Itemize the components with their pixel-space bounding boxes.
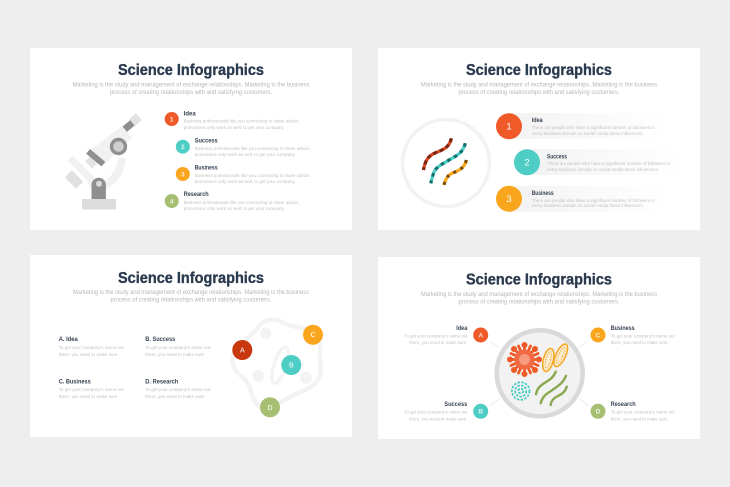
step 1 Idea: There are people who have a significant number of followers in <box>532 125 655 130</box>
title: Science Infographics <box>118 62 264 79</box>
list item: 4 Research: 4 <box>170 198 174 205</box>
text block: B. Success: To get your company's name out <box>145 345 211 350</box>
list item: 2 Success: 2 <box>181 144 185 151</box>
list item: 3 Business: promotions only work as well, to get your company. <box>195 179 296 184</box>
callout B Success: Success <box>444 402 468 408</box>
list item: 3 Business: Business professionals like you connecting to share advice, <box>195 173 311 178</box>
callout B Success <box>404 402 488 421</box>
subtitle <box>421 291 658 306</box>
step 1 Idea: every business domain on social media these influencers. <box>532 131 644 136</box>
step 3 Business: There are people who have a significant number of followers in <box>532 198 655 203</box>
panel: cell diagram <box>30 255 352 437</box>
connector lines <box>490 341 588 406</box>
subtitle: Marketing is the study and management of exchange relationships. Marketing is the business <box>72 82 310 88</box>
callout A Idea: To get your company's name out <box>404 333 468 338</box>
step 2 Success <box>514 149 680 175</box>
text block: B. Success: there, you need to make sure. <box>145 352 205 357</box>
callout D Research: To get your company's name out <box>611 409 675 414</box>
list item: 1 Idea: promotions only work as well, to get your company. <box>184 125 285 130</box>
text block: C. Business: C. Business <box>59 379 91 385</box>
text block: D. Research: To get your company's name out <box>145 387 211 392</box>
amber bacilli <box>541 342 570 373</box>
subtitle: process of creating relationships with and satisfying customers. <box>110 296 272 304</box>
list item: 4 Research: Business professionals like you connecting to share advice, <box>184 200 300 205</box>
list item: 2 Success: promotions only work as well, to get your company. <box>195 152 296 157</box>
callout D Research: Research <box>611 402 636 408</box>
panel: bacteria strands <box>378 48 700 230</box>
title: Science Infographics <box>466 62 612 79</box>
subtitle: process of creating relationships with and satisfying customers. <box>110 89 272 96</box>
subtitle: Marketing is the study and management of exchange relationships. Marketing is the business <box>73 289 310 296</box>
list item: 1 Idea <box>165 111 300 130</box>
list item: 2 Success: Success <box>195 138 218 144</box>
text block: C. Business: there, you need to make sure. <box>59 394 119 399</box>
step 2 Success: There are people who have a significant number of followers in <box>547 161 670 166</box>
marker B <box>281 355 301 375</box>
step 2 Success: Success <box>547 154 568 160</box>
marker B: B <box>289 362 294 370</box>
subtitle: Marketing is the study and management of exchange relationships. Marketing is the business <box>421 291 658 298</box>
subtitle <box>421 82 658 96</box>
callout B Success: To get your company's name out <box>404 409 468 414</box>
callout C Business: Business <box>611 326 635 332</box>
green worms <box>536 372 567 405</box>
marker C <box>303 325 323 345</box>
icon: microscope <box>65 113 142 210</box>
text block: A. Idea: To get your company's name out <box>59 345 124 350</box>
list item: 3 Business: Business <box>195 166 218 172</box>
subtitle: Marketing is the study and management of exchange relationships. Marketing is the business <box>421 82 658 88</box>
text block: D. Research: D. Research <box>145 379 179 385</box>
subtitle <box>73 289 310 304</box>
step 1 Idea <box>496 113 665 139</box>
panel: microscope list <box>30 48 352 230</box>
list item: 4 Research <box>165 192 300 211</box>
marker D: D <box>267 405 273 412</box>
icon: cell outline <box>233 320 321 409</box>
list item: 2 Success: Business professionals like you connecting to share advice, <box>195 146 311 151</box>
callout C Business: there, you need to make sure. <box>611 340 669 345</box>
callout C Business: To get your company's name out <box>611 333 675 338</box>
virus <box>508 343 541 376</box>
title: Science Infographics <box>118 270 264 287</box>
step 3 Business: 3 <box>506 194 512 205</box>
icon: petri circle with strands <box>402 120 490 206</box>
subtitle: process of creating relationships with and satisfying customers. <box>458 298 620 306</box>
step 3 Business: Business <box>532 191 554 197</box>
icon: petri dish <box>497 330 583 416</box>
text block: D. Research: there, you need to make sure. <box>145 394 205 399</box>
title: Science Infographics <box>466 272 612 288</box>
text block: C. Business <box>59 379 124 399</box>
list item: 4 Research: Research <box>184 192 209 198</box>
marker D <box>260 397 280 417</box>
text block: A. Idea <box>59 337 124 357</box>
callout D Research <box>590 402 675 421</box>
step 2 Success: every business domain on social media these influencers. <box>547 167 659 172</box>
list item: 4 Research: promotions only work as well, to get your company. <box>184 206 285 211</box>
step 2 Success: 2 <box>524 158 530 169</box>
list item: 1 Idea: Idea <box>184 111 196 117</box>
step 3 Business <box>496 186 665 212</box>
list item: 2 Success <box>176 138 311 157</box>
list item: 3 Business: 3 <box>181 171 185 178</box>
marker C: C <box>310 332 316 339</box>
subtitle: process of creating relationships with and satisfying customers. <box>458 89 620 96</box>
text block: C. Business: To get your company's name out <box>59 387 124 392</box>
list item: 1 Idea: 1 <box>170 116 174 123</box>
callout D Research: D <box>596 409 601 416</box>
marker A: A <box>240 348 245 354</box>
callout B Success: there, you need to make sure. <box>409 416 467 421</box>
callout D Research: there, you need to make sure. <box>611 416 669 421</box>
panel: petri dish <box>378 257 700 439</box>
text block: A. Idea: A. Idea <box>59 337 78 343</box>
marker A <box>232 340 252 360</box>
subtitle <box>72 82 310 96</box>
text block: B. Success <box>145 337 211 357</box>
callout A Idea: A <box>478 332 483 339</box>
callout C Business: C <box>596 332 601 339</box>
teal cell <box>512 382 530 400</box>
list item: 1 Idea: Business professionals like you connecting to share advice, <box>184 119 300 124</box>
callout C Business <box>590 326 675 345</box>
step 3 Business: every business domain on social media these influencers. <box>532 203 644 208</box>
step 1 Idea: Idea <box>532 118 543 124</box>
callout A Idea: Idea <box>456 326 468 332</box>
text block: A. Idea: there, you need to make sure. <box>59 352 119 357</box>
list item: 3 Business <box>176 166 311 184</box>
callout B Success: B <box>478 409 483 416</box>
text block: D. Research <box>145 379 211 399</box>
text block: B. Success: B. Success <box>145 337 176 343</box>
callout A Idea <box>404 326 488 345</box>
callout A Idea: there, you need to make sure. <box>409 340 467 345</box>
step 1 Idea: 1 <box>506 122 512 133</box>
